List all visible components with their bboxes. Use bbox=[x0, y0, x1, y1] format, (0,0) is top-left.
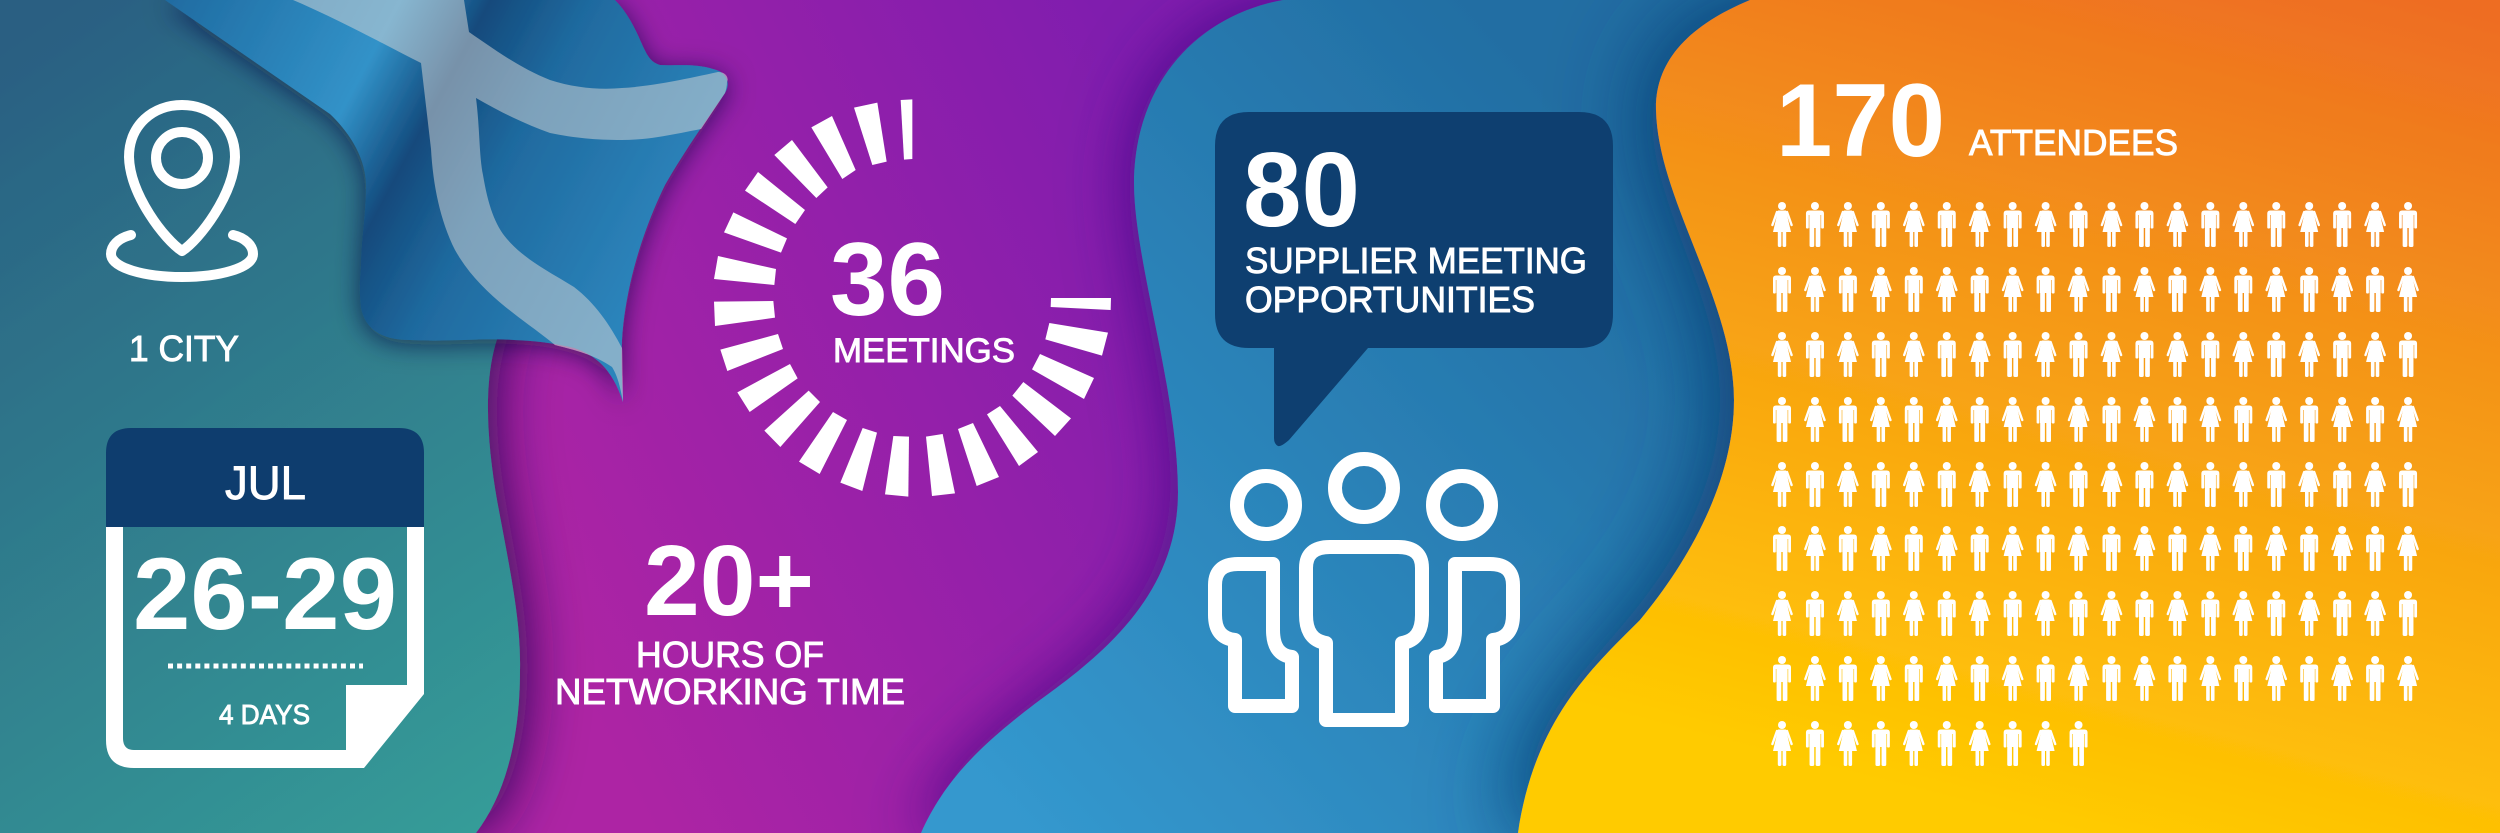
panel: orange bbox=[1518, 0, 2500, 833]
icon: group of three people bbox=[1215, 459, 1513, 720]
panel: teal bbox=[0, 0, 520, 833]
icon: location pin bbox=[111, 105, 253, 277]
month: JUL bbox=[225, 456, 306, 509]
label: hours of: HOURS OF bbox=[636, 634, 824, 675]
chart: radial meetings gauge bbox=[714, 99, 1111, 497]
stat: 20+: 20+ bbox=[644, 525, 814, 637]
callout: speech bubble bbox=[1215, 112, 1613, 446]
label: networking time: NETWORKING TIME bbox=[555, 671, 905, 712]
dates: 26-29 bbox=[133, 537, 397, 651]
label: meetings: MEETINGS bbox=[833, 332, 1015, 370]
icon: calendar bbox=[106, 428, 424, 768]
stat: 80: 80 bbox=[1243, 131, 1360, 249]
chart: pictogram grid of 170 attendees bbox=[1772, 202, 2418, 766]
bubble shape bbox=[1215, 112, 1613, 446]
flag of Scotland bbox=[165, 0, 728, 402]
stat: 36: 36 bbox=[830, 222, 945, 338]
duration: 4 DAYS bbox=[219, 699, 310, 730]
calendar header bbox=[106, 428, 424, 527]
label: attendees: ATTENDEES bbox=[1969, 122, 2178, 163]
label: opportunities: OPPORTUNITIES bbox=[1245, 279, 1535, 320]
flag saltire cross bbox=[293, 0, 728, 402]
panel: blue bbox=[921, 0, 1800, 833]
label: supplier meeting: SUPPLIER MEETING bbox=[1245, 240, 1587, 281]
calendar page outline bbox=[106, 527, 424, 768]
label: 1 city: 1 CITY bbox=[129, 328, 239, 369]
stat: 170: 170 bbox=[1776, 63, 1945, 179]
dotted divider bbox=[168, 664, 363, 668]
flag cloth bbox=[165, 0, 728, 402]
